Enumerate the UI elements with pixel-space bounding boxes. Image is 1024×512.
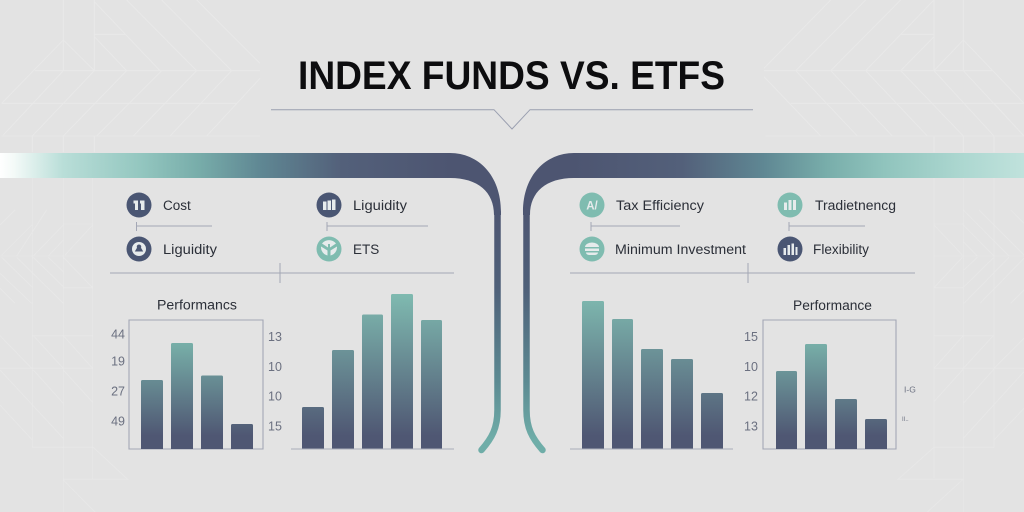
connector: liquidity bbox=[327, 222, 428, 231]
y axis labels: 12 bbox=[744, 390, 758, 404]
feature: minimum investment bbox=[580, 236, 746, 262]
chart title: Performancs bbox=[157, 298, 237, 312]
y axis labels right: 10 bbox=[268, 360, 282, 374]
feature: liquidity top bbox=[316, 192, 407, 218]
feature: tax efficiency: Tax Efficiency bbox=[616, 198, 704, 213]
y axis labels right: 13 bbox=[268, 330, 282, 344]
feature: ets bbox=[316, 236, 379, 262]
background pattern: top right bbox=[764, 0, 1024, 152]
title rule with notch bbox=[271, 110, 753, 129]
feature: cost: Cost bbox=[163, 198, 191, 213]
background pattern: top left bbox=[2, 0, 260, 152]
baseline bbox=[291, 448, 454, 450]
bars bbox=[141, 343, 253, 449]
y axis labels: 15 bbox=[744, 330, 758, 344]
feature: liquidity bottom: Liguidity bbox=[163, 242, 217, 257]
baseline bbox=[570, 448, 733, 450]
y axis labels right: 10 bbox=[268, 390, 282, 404]
connector: tax efficiency bbox=[591, 222, 680, 231]
background pattern: lower right bbox=[897, 178, 1024, 512]
y axis labels left: 19 bbox=[111, 354, 125, 368]
chart title: Performance bbox=[793, 298, 872, 313]
chart: etfs falling bars bbox=[570, 301, 733, 449]
bars bbox=[302, 294, 442, 449]
y axis labels: 10 bbox=[744, 360, 758, 374]
small side labels bbox=[902, 384, 916, 423]
feature: tax efficiency bbox=[580, 192, 704, 218]
right curved band bbox=[523, 153, 1024, 450]
connector: tradietnencg bbox=[789, 222, 865, 231]
feature: tax efficiency: A/ bbox=[586, 200, 599, 212]
feature: liquidity top: Liguidity bbox=[353, 198, 407, 213]
background pattern: lower left bbox=[0, 178, 128, 512]
y axis labels bbox=[744, 330, 758, 434]
panel: etfs features bbox=[570, 192, 915, 283]
feature: tradietnencg: Tradietnencg bbox=[815, 198, 896, 213]
y axis labels right: 15 bbox=[268, 420, 282, 434]
title: INDEX FUNDS VS. ETFS bbox=[298, 54, 725, 98]
divider bbox=[570, 263, 915, 283]
small side labels: II.. bbox=[902, 417, 909, 423]
panel: index funds features bbox=[110, 192, 454, 283]
y axis labels left: 44 bbox=[111, 328, 125, 342]
chart: index funds rising bars bbox=[291, 294, 454, 449]
y axis labels left: 49 bbox=[111, 414, 125, 428]
feature: liquidity bottom bbox=[126, 236, 217, 262]
chart frame bbox=[763, 320, 896, 449]
y axis labels left: 27 bbox=[111, 384, 125, 398]
chart frame bbox=[129, 320, 263, 449]
connector: cost bbox=[136, 222, 212, 231]
chart: index funds performance box bbox=[111, 298, 282, 449]
chart: etfs performance box bbox=[744, 298, 916, 449]
bars bbox=[776, 344, 887, 449]
divider bbox=[110, 263, 454, 283]
small side labels: I-G bbox=[904, 384, 916, 394]
y axis labels right bbox=[268, 330, 282, 434]
feature: cost bbox=[126, 192, 191, 218]
feature: minimum investment: Minimum Investment bbox=[615, 242, 746, 257]
bars bbox=[582, 301, 723, 449]
feature: tradietnencg bbox=[778, 192, 896, 218]
y axis labels left bbox=[111, 328, 125, 428]
y axis labels: 13 bbox=[744, 420, 758, 434]
left curved band bbox=[0, 153, 501, 450]
feature: ets: ETS bbox=[353, 242, 379, 257]
feature: flexibility: Flexibility bbox=[813, 242, 869, 257]
feature: flexibility bbox=[778, 236, 869, 262]
